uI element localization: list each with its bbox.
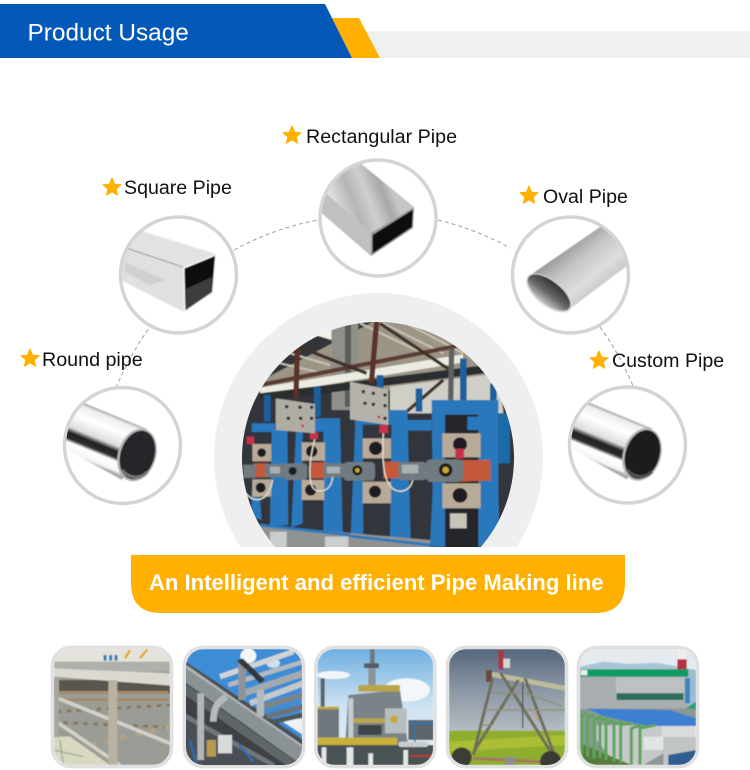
- round pipe ring: [64, 388, 180, 504]
- header grey strip: [366, 31, 750, 58]
- custom pipe ring: [570, 387, 686, 503]
- tile 4: irrigation: [447, 647, 567, 770]
- gear motors: [243, 459, 463, 482]
- yellow banner: [131, 555, 625, 613]
- central photo: pipe making line: [240, 320, 517, 553]
- central grey halo: [214, 293, 543, 547]
- stand 3: [351, 410, 432, 542]
- title: Product Usage: [28, 20, 189, 46]
- stand 1: [252, 423, 288, 526]
- roller blocks: [252, 433, 481, 508]
- pipe: round: [62, 386, 182, 506]
- pipe: custom: [568, 385, 688, 505]
- application photo tiles: [52, 647, 435, 767]
- tile 1: water treatment: [52, 647, 172, 767]
- header yellow accent: [332, 18, 380, 58]
- cables: [246, 433, 413, 500]
- label: round pipe: Round pipe: [42, 349, 143, 371]
- pipe: rectangular: [318, 158, 438, 278]
- label: square pipe: Square Pipe: [124, 177, 232, 199]
- header blue bar: [0, 4, 352, 58]
- base: [260, 526, 431, 547]
- orange bands: [253, 460, 491, 482]
- rectangular pipe ring: [320, 160, 436, 276]
- tile 5: cooling towers: [578, 647, 698, 767]
- pipe: oval: [510, 215, 630, 335]
- oval pipe ring: [512, 217, 628, 333]
- stand 2: [291, 418, 343, 533]
- tile 2: steel pipelines: [183, 647, 304, 767]
- banner text: An Intelligent and efficient Pipe Making line: [149, 570, 603, 595]
- stand 4: [430, 400, 499, 547]
- pipe: square: [118, 215, 238, 335]
- dashed connector arc: [116, 220, 633, 388]
- header banner: [0, 4, 750, 58]
- label: custom pipe: Custom Pipe: [612, 350, 724, 372]
- square pipe ring: [120, 217, 236, 333]
- label: rectangular pipe: Rectangular Pipe: [306, 126, 457, 148]
- control boxes: [276, 398, 315, 433]
- red handles: [247, 425, 464, 459]
- tile 3: refinery: [316, 647, 435, 767]
- label: oval pipe: Oval Pipe: [543, 186, 628, 208]
